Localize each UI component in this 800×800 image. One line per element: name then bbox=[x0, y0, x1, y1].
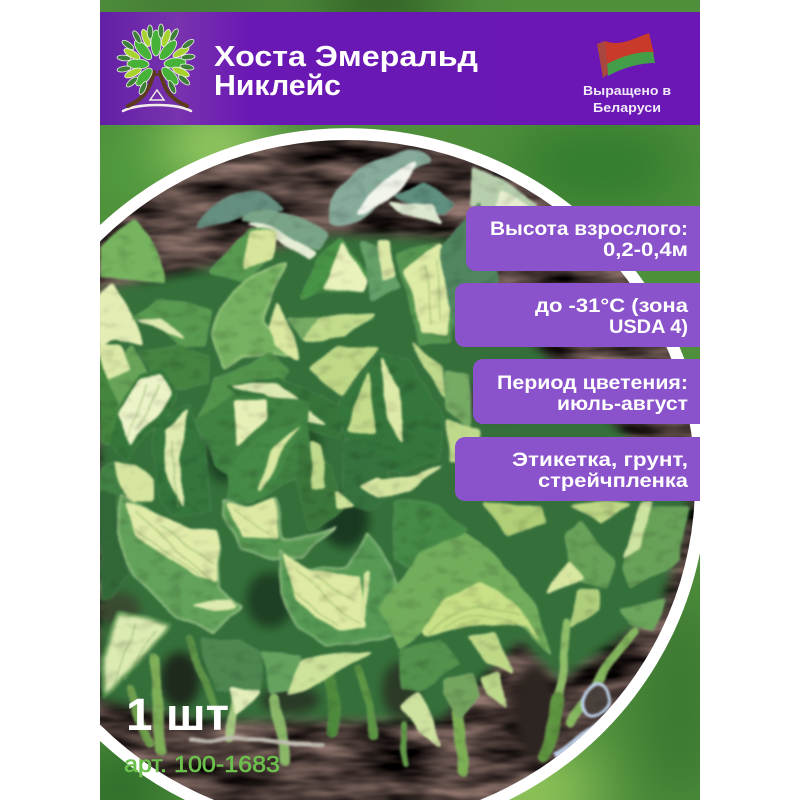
stems bbox=[130, 623, 633, 770]
panel: flowering period: Период цветения: bbox=[497, 372, 688, 394]
photo: hosta plant on mulch bbox=[100, 130, 700, 800]
made in Belarus label bbox=[583, 83, 671, 115]
leaf veins bbox=[112, 260, 535, 690]
quantity label: 1 шт bbox=[126, 689, 229, 740]
middle leaves bbox=[100, 395, 690, 657]
panel: frost hardiness: до -31°С (зона bbox=[535, 295, 688, 317]
white circular photo ring bbox=[100, 128, 700, 800]
panel: frost hardiness bbox=[455, 283, 700, 347]
tree leaves bbox=[117, 24, 195, 96]
title: Никлейс bbox=[214, 70, 341, 102]
top header band bbox=[100, 12, 700, 125]
upper leaves bbox=[100, 200, 500, 473]
panel: frost hardiness: USDA 4) bbox=[609, 316, 688, 338]
panel: package contents: стрейчпленка bbox=[538, 470, 688, 492]
panel: adult height: Высота взрослого: bbox=[490, 218, 688, 240]
article number: арт. 100-1683 bbox=[124, 751, 280, 777]
plastic tag bbox=[552, 680, 613, 758]
made in Belarus label: Беларуси bbox=[593, 100, 661, 115]
icon: Belarus flag bbox=[597, 33, 655, 78]
icon: tree logo bbox=[117, 24, 195, 111]
upper teal leaves bbox=[100, 150, 540, 285]
panel: adult height: 0,2-0,4м bbox=[603, 239, 688, 261]
title: Хоста Эмеральд bbox=[214, 41, 478, 73]
panel: adult height bbox=[466, 206, 700, 271]
lower leaves bbox=[103, 613, 515, 747]
panel: flowering period: июль-август bbox=[557, 393, 688, 415]
panel: package contents: Этикетка, грунт, bbox=[512, 449, 688, 471]
made in Belarus label: Выращено в bbox=[583, 83, 671, 98]
panel: package contents bbox=[455, 437, 700, 501]
tree trunk bbox=[123, 65, 191, 111]
panel: flowering period bbox=[473, 359, 700, 424]
title bbox=[214, 41, 478, 102]
